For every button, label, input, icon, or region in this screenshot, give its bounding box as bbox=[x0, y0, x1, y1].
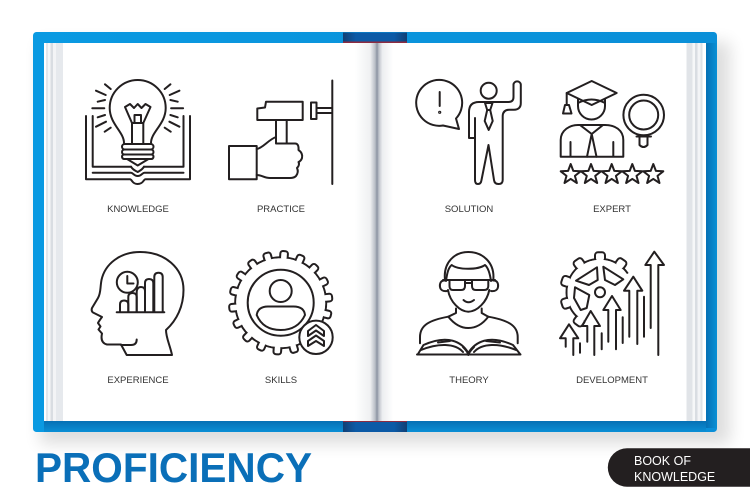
badge: book of knowledge: BOOK OF bbox=[634, 454, 691, 468]
open book bbox=[33, 32, 717, 432]
icon: expert, graduate with magnifier and stars bbox=[561, 81, 664, 183]
gear teeth bbox=[229, 251, 333, 355]
label: experience: EXPERIENCE bbox=[107, 375, 169, 386]
book cover bbox=[33, 32, 717, 432]
icon: theory, man with glasses reading a book bbox=[417, 252, 520, 355]
title: PROFICIENCY bbox=[35, 444, 312, 491]
label: development: DEVELOPMENT bbox=[576, 375, 648, 386]
label: theory: THEORY bbox=[449, 375, 489, 386]
badge: book of knowledge bbox=[608, 448, 750, 487]
icon: skills, gear with person and badge bbox=[229, 251, 333, 355]
icon: development, gear with rising arrows bbox=[560, 252, 664, 355]
badge: book of knowledge: KNOWLEDGE bbox=[634, 470, 715, 484]
icon: knowledge, light bulb over open book bbox=[86, 80, 190, 184]
label: practice: PRACTICE bbox=[257, 204, 305, 215]
book shadow bbox=[40, 42, 730, 444]
label: solution: SOLUTION bbox=[445, 204, 493, 215]
icon: practice, hand with hammer and nail bbox=[229, 80, 332, 184]
book pages bbox=[44, 43, 706, 421]
icon: solution, man with speech bubble bbox=[416, 80, 521, 184]
icon: experience, head with clock and bar chart bbox=[92, 252, 184, 355]
label: knowledge: KNOWLEDGE bbox=[107, 204, 169, 215]
star rating bbox=[561, 164, 663, 183]
label: skills: SKILLS bbox=[265, 375, 297, 386]
label: expert: EXPERT bbox=[593, 204, 631, 215]
gear teeth bbox=[560, 252, 628, 328]
